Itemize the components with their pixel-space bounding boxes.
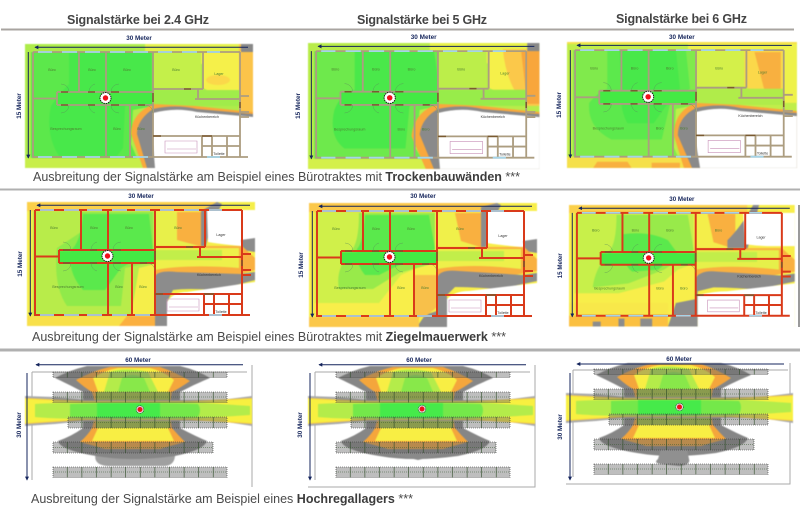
- dimensions: 60 Meter: [406, 357, 432, 364]
- heatmap: [567, 42, 797, 168]
- panel: brick 6 GHz: [557, 196, 795, 327]
- room labels: Küchenbereich: [479, 274, 503, 278]
- room labels: Besprechungsraum: [334, 127, 365, 131]
- room labels: Küchenbereich: [737, 275, 761, 279]
- dimensions: [298, 193, 532, 317]
- room labels: Büro: [666, 66, 674, 70]
- room labels: Toilette: [497, 311, 509, 315]
- room labels: [332, 227, 509, 315]
- dimensions: [17, 193, 250, 316]
- doors and windows: [322, 211, 524, 316]
- room labels: Büro: [632, 228, 639, 232]
- room labels: Büro: [592, 228, 600, 232]
- access point: [643, 91, 654, 102]
- dimensions: 15 Meter: [295, 92, 302, 119]
- room labels: Büro: [137, 127, 145, 131]
- room labels: Büro: [332, 67, 339, 71]
- edge sliver: [798, 205, 800, 327]
- room labels: Lager: [214, 72, 224, 76]
- room labels: Lager: [500, 71, 510, 75]
- room labels: Büro: [123, 68, 131, 72]
- panel: warehouse 6 GHz: [557, 356, 793, 484]
- room labels: [592, 228, 767, 315]
- dimensions: 15 Meter: [16, 93, 23, 119]
- dimensions: [557, 196, 790, 317]
- walls: [577, 213, 791, 316]
- access point: [643, 253, 654, 263]
- room labels: Büro: [631, 66, 638, 70]
- racks: [53, 372, 227, 478]
- caption: brick: Ausbreitung der Signalstärke am Beispiel eines Bürotraktes mit Ziegelmauerwerk ***: [32, 330, 506, 344]
- caption: warehouse: Ausbreitung der Signalstärke am Beispiel eines Hochregallagers ***: [31, 492, 413, 506]
- room labels: Toilette: [755, 311, 767, 315]
- dimensions: 30 Meter: [16, 412, 23, 438]
- room labels: Besprechungsraum: [593, 126, 624, 130]
- room labels: Büro: [715, 228, 722, 232]
- caption: drywall: Ausbreitung der Signalstärke am Beispiel eines Bürotraktes mit Trockenbauwänden ***: [33, 170, 520, 184]
- room labels: Büro: [656, 126, 664, 130]
- racks: [336, 372, 510, 478]
- room labels: Besprechungsraum: [334, 286, 366, 290]
- dimensions: 30 Meter: [669, 34, 695, 41]
- heatmap: [25, 366, 252, 466]
- panel: drywall 2.4 GHz: [16, 35, 253, 168]
- doors and windows: [321, 51, 526, 158]
- dimensions: [556, 34, 792, 158]
- panel: drywall 5 GHz: [295, 34, 539, 169]
- panel: brick 2.4 GHz: [17, 193, 255, 326]
- frame: [32, 365, 252, 487]
- room labels: Büro: [125, 226, 133, 230]
- room labels: Büro: [421, 286, 429, 290]
- doors and windows: [38, 52, 240, 157]
- room labels: Lager: [757, 235, 766, 239]
- room labels: [332, 67, 511, 157]
- walls: [33, 52, 249, 157]
- walls: [316, 51, 535, 158]
- dimensions: 30 Meter: [126, 35, 152, 42]
- dimensions: 60 Meter: [666, 356, 692, 363]
- room labels: Toilette: [213, 152, 225, 156]
- room labels: Büro: [680, 126, 688, 130]
- dimensions: [295, 34, 534, 159]
- heatmap: [25, 44, 253, 168]
- room labels: Büro: [398, 127, 405, 131]
- room labels: Besprechungsraum: [52, 285, 84, 289]
- room labels: Besprechungsraum: [50, 127, 82, 131]
- dimensions: 30 Meter: [297, 412, 304, 438]
- title: 5 GHz: Signalstärke bei 5 GHz: [357, 13, 487, 27]
- room labels: Büro: [172, 68, 180, 72]
- room labels: [50, 226, 227, 314]
- walls: [35, 210, 251, 315]
- room labels: Büro: [332, 227, 340, 231]
- walls: [317, 211, 533, 316]
- room labels: [590, 66, 768, 156]
- heatmap: [308, 366, 535, 460]
- dimensions: [16, 35, 248, 158]
- access point: [384, 92, 395, 103]
- panel: warehouse 2.4 GHz: [16, 357, 252, 487]
- room labels: Büro: [456, 227, 464, 231]
- header rule: [1, 28, 794, 30]
- dimensions: 30 Meter: [669, 196, 695, 203]
- room labels: Lager: [758, 70, 768, 74]
- dimensions: 30 Meter: [410, 193, 436, 200]
- dimensions: 30 Meter: [557, 414, 564, 440]
- doors and windows: [40, 210, 242, 315]
- room labels: Büro: [397, 286, 405, 290]
- panel: drywall 6 GHz: [556, 34, 797, 168]
- heatmap: [569, 205, 795, 327]
- room labels: Büro: [680, 286, 688, 290]
- doors and windows: [582, 213, 782, 316]
- access point marker: [136, 406, 144, 413]
- dimensions: 15 Meter: [557, 253, 564, 278]
- room labels: Küchenbereich: [481, 115, 505, 119]
- room labels: Besprechungsraum: [594, 286, 625, 290]
- title: 6 GHz: Signalstärke bei 6 GHz: [616, 12, 747, 26]
- room labels: Büro: [372, 67, 380, 71]
- room labels: Büro: [90, 226, 98, 230]
- room labels: Büro: [113, 127, 121, 131]
- dimensions: 60 Meter: [125, 357, 151, 364]
- heatmap: [308, 43, 539, 169]
- dimensions: [557, 356, 784, 480]
- walls: [575, 50, 793, 157]
- dimensions: 15 Meter: [298, 252, 305, 278]
- room labels: Toilette: [757, 152, 768, 156]
- panel: brick 5 GHz: [298, 193, 537, 327]
- room labels: Büro: [457, 67, 465, 71]
- doors and windows: [580, 50, 784, 157]
- room labels: Lager: [498, 234, 508, 238]
- room labels: Büro: [422, 127, 430, 131]
- title: 2.4 GHz: Signalstärke bei 2.4 GHz: [67, 13, 209, 27]
- room labels: Büro: [372, 227, 380, 231]
- dimensions: 30 Meter: [128, 193, 154, 200]
- row rule 2: [0, 348, 800, 352]
- room labels: Büro: [88, 68, 96, 72]
- room labels: [48, 68, 225, 156]
- dimensions: [16, 357, 243, 480]
- dimensions: 15 Meter: [17, 251, 24, 277]
- room labels: Büro: [656, 286, 664, 290]
- racks: [594, 369, 768, 474]
- room labels: Büro: [590, 66, 598, 70]
- heatmap: [566, 363, 793, 466]
- row rule 1: [0, 188, 800, 190]
- access point: [384, 252, 395, 262]
- heatmap: [309, 203, 537, 327]
- room labels: Lager: [216, 233, 226, 237]
- dimensions: 30 Meter: [411, 34, 437, 41]
- room labels: Büro: [115, 285, 123, 289]
- access point: [102, 250, 113, 262]
- room labels: Büro: [715, 66, 723, 70]
- access point marker: [676, 403, 683, 411]
- room labels: Küchenbereich: [738, 114, 763, 118]
- room labels: Toilette: [215, 310, 227, 314]
- frame: [566, 363, 790, 484]
- room labels: Büro: [666, 228, 674, 232]
- heatmap: [27, 202, 255, 326]
- room labels: Toilette: [499, 153, 511, 157]
- room labels: Büro: [50, 226, 58, 230]
- room labels: Büro: [407, 227, 415, 231]
- room labels: Büro: [48, 68, 56, 72]
- dimensions: [297, 357, 526, 480]
- room labels: Küchenbereich: [197, 273, 221, 277]
- access point marker: [418, 405, 426, 413]
- access point: [100, 92, 111, 104]
- dimensions: 15 Meter: [556, 91, 563, 118]
- panel: warehouse 5 GHz: [297, 357, 535, 487]
- room labels: Büro: [139, 285, 147, 289]
- room labels: Büro: [408, 67, 415, 71]
- room labels: Küchenbereich: [195, 115, 219, 119]
- room labels: Büro: [174, 226, 182, 230]
- frame: [308, 365, 535, 487]
